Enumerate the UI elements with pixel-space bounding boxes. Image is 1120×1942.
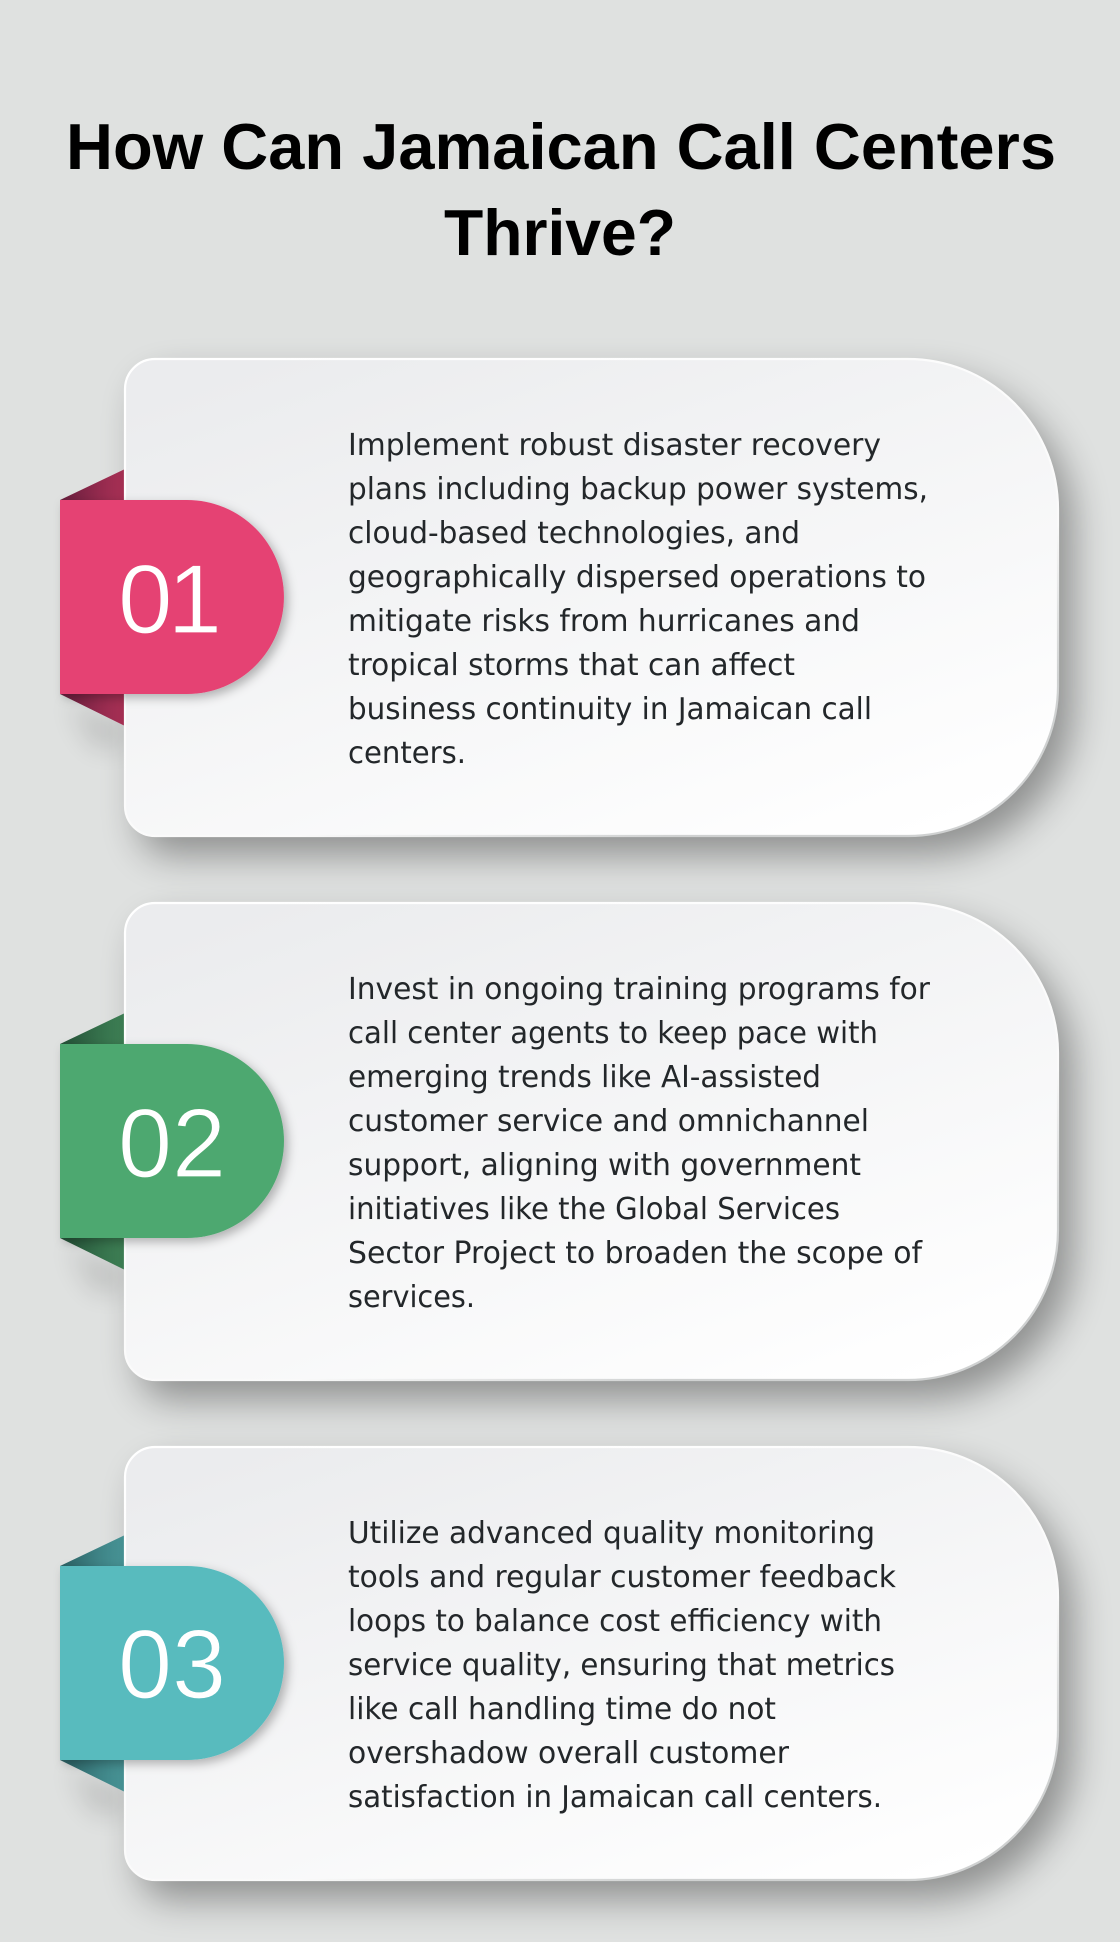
body text 03: like call handling time do not [348, 1692, 776, 1727]
card 03 [125, 1447, 1058, 1880]
card shadow 03 [140, 1466, 1073, 1899]
body text 02: services. [348, 1280, 475, 1315]
body text 03: tools and regular customer feedback [348, 1560, 896, 1595]
body text 02: call center agents to keep pace with [348, 1016, 878, 1051]
body text 01: cloud-based technologies, and [348, 516, 800, 551]
card shadow 02 [140, 922, 1073, 1399]
body text 01: Implement robust disaster recovery [348, 428, 881, 463]
number badge 01 [60, 500, 284, 694]
panel: step 02 [60, 903, 1073, 1399]
card 02 [125, 903, 1058, 1380]
body text 02: initiatives like the Global Services [348, 1192, 840, 1227]
body text 02 [348, 972, 930, 1315]
number badge 03 [60, 1566, 284, 1760]
body text 01: geographically dispersed operations to [348, 560, 926, 595]
card 01 [125, 359, 1058, 836]
body text 02: customer service and omnichannel [348, 1104, 869, 1139]
body text 03 [348, 1516, 896, 1815]
body text 03: Utilize advanced quality monitoring [348, 1516, 875, 1551]
body text 02: support, aligning with government [348, 1148, 861, 1183]
number badge 03: 03 [118, 1609, 226, 1719]
title: How Can Jamaican Call Centers [66, 110, 1056, 183]
body text 01: centers. [348, 736, 466, 771]
body text 03: loops to balance cost efficiency with [348, 1604, 882, 1639]
fold shadow 03 [70, 1766, 124, 1811]
ribbon fold top 03 [60, 1535, 125, 1566]
ribbon fold top 01 [60, 469, 125, 500]
body text 01: tropical storms that can affect [348, 648, 795, 683]
body text 01: plans including backup power systems, [348, 472, 928, 507]
body text 02: Sector Project to broaden the scope of [348, 1236, 923, 1271]
body text 01: business continuity in Jamaican call [348, 692, 872, 727]
title [66, 110, 1056, 269]
number badge 02: 02 [118, 1088, 226, 1198]
ribbon fold bottom 01 [60, 694, 125, 726]
body text 03: satisfaction in Jamaican call centers. [348, 1780, 882, 1815]
card shadow 01 [140, 378, 1073, 855]
fold shadow 01 [70, 700, 124, 745]
panel: step 01 [60, 359, 1073, 855]
body text 02: emerging trends like AI-assisted [348, 1060, 821, 1095]
body text 03: service quality, ensuring that metrics [348, 1648, 895, 1683]
panel: step 03 [60, 1447, 1073, 1899]
ribbon fold bottom 02 [60, 1238, 125, 1270]
ribbon fold bottom 03 [60, 1760, 125, 1792]
body text 01 [348, 428, 928, 771]
body text 02: Invest in ongoing training programs for [348, 972, 930, 1007]
title: Thrive? [444, 196, 676, 269]
fold shadow 02 [70, 1244, 124, 1289]
body text 03: overshadow overall customer [348, 1736, 789, 1771]
body text 01: mitigate risks from hurricanes and [348, 604, 860, 639]
number badge 02 [60, 1044, 284, 1238]
number badge 01: 01 [118, 544, 222, 654]
ribbon fold top 02 [60, 1013, 125, 1044]
